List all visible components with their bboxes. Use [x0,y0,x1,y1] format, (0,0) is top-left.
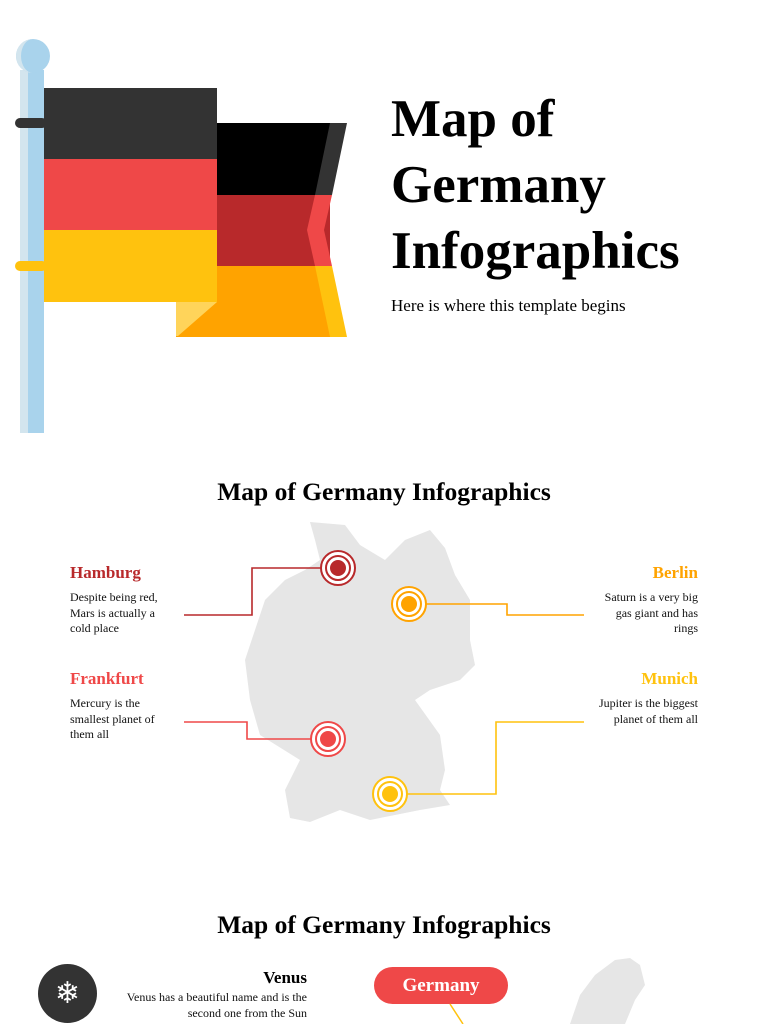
label: Munich: Jupiter is the biggest [599,696,698,710]
main title: Germany [391,156,606,214]
label: Hamburg: cold place [70,621,119,635]
label: Frankfurt: Frankfurt [70,669,144,688]
main title: Infographics [391,222,680,280]
badge: Germany [374,967,508,1004]
europe map fragment [449,958,645,1024]
text: Venus [126,968,307,1020]
label: Hamburg: Hamburg [70,563,141,582]
icon: dark circle snowflake [38,964,97,1023]
icon: dark circle snowflake: ❄ [55,977,80,1010]
subtitle: Here is where this template begins [391,296,626,315]
label: Frankfurt: them all [70,727,109,741]
section heading 2: Map of Germany Infographics [217,910,551,939]
label: Hamburg: Mars is actually a [70,606,155,620]
label: Frankfurt: smallest planet of [70,712,155,726]
label: Berlin: gas giant and has [616,606,698,620]
label: Berlin [605,563,698,635]
label: Berlin: Berlin [653,563,698,582]
text: Venus: second one from the Sun [188,1006,307,1020]
main title [391,90,680,280]
label: Frankfurt [70,669,155,741]
text: Venus: Venus has a beautiful name and is the [127,990,307,1004]
label: Munich: Munich [641,669,698,688]
label: Frankfurt: Mercury is the [70,696,140,710]
badge: Germany: Germany [402,975,480,996]
section heading 1: Map of Germany Infographics [217,477,551,506]
label: Munich: planet of them all [614,712,698,726]
text: Venus: Venus [263,968,307,987]
flag illustration [15,39,347,433]
label: Hamburg [70,563,158,635]
label: Berlin: Saturn is a very big [605,590,698,604]
main title: Map of [391,90,554,148]
label: Hamburg: Despite being red, [70,590,158,604]
label: Berlin: rings [674,621,698,635]
germany map with markers [184,522,584,822]
label: Munich [599,669,698,726]
